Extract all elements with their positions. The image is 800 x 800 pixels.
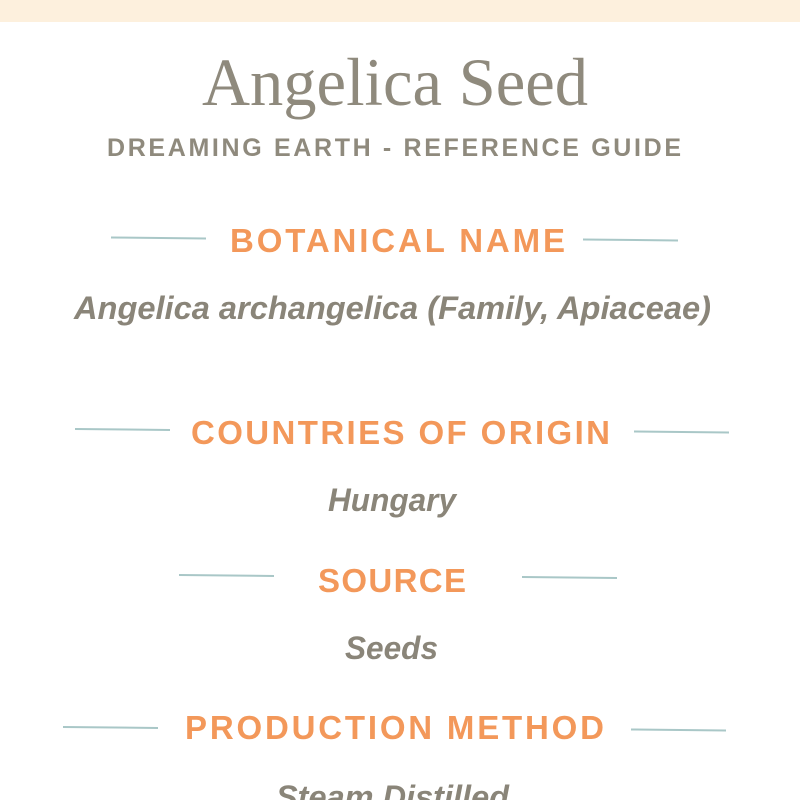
countries heading: COUNTRIES OF ORIGIN xyxy=(191,414,610,451)
botanical name right rule xyxy=(583,240,678,241)
production left rule xyxy=(63,727,158,728)
subtitle: DREAMING EARTH - REFERENCE GUIDE xyxy=(107,134,681,162)
botanical name value: Angelica archangelica (Family, Apiaceae) xyxy=(73,290,711,326)
section: production method xyxy=(63,709,726,800)
source right rule xyxy=(522,577,617,578)
source heading: SOURCE xyxy=(318,562,466,599)
top cream band xyxy=(0,0,800,22)
botanical name left rule xyxy=(111,238,206,239)
source left rule xyxy=(179,575,274,576)
section: countries of origin xyxy=(75,414,729,518)
production heading: PRODUCTION METHOD xyxy=(185,709,604,746)
countries right rule xyxy=(634,432,729,433)
production right rule xyxy=(631,730,726,731)
countries value: Hungary xyxy=(328,482,458,518)
source value: Seeds xyxy=(345,630,438,666)
title: Angelica Seed xyxy=(202,44,588,120)
section: botanical name xyxy=(73,222,711,326)
botanical name heading: BOTANICAL NAME xyxy=(230,222,565,259)
section: source xyxy=(179,562,617,666)
countries left rule xyxy=(75,429,170,430)
